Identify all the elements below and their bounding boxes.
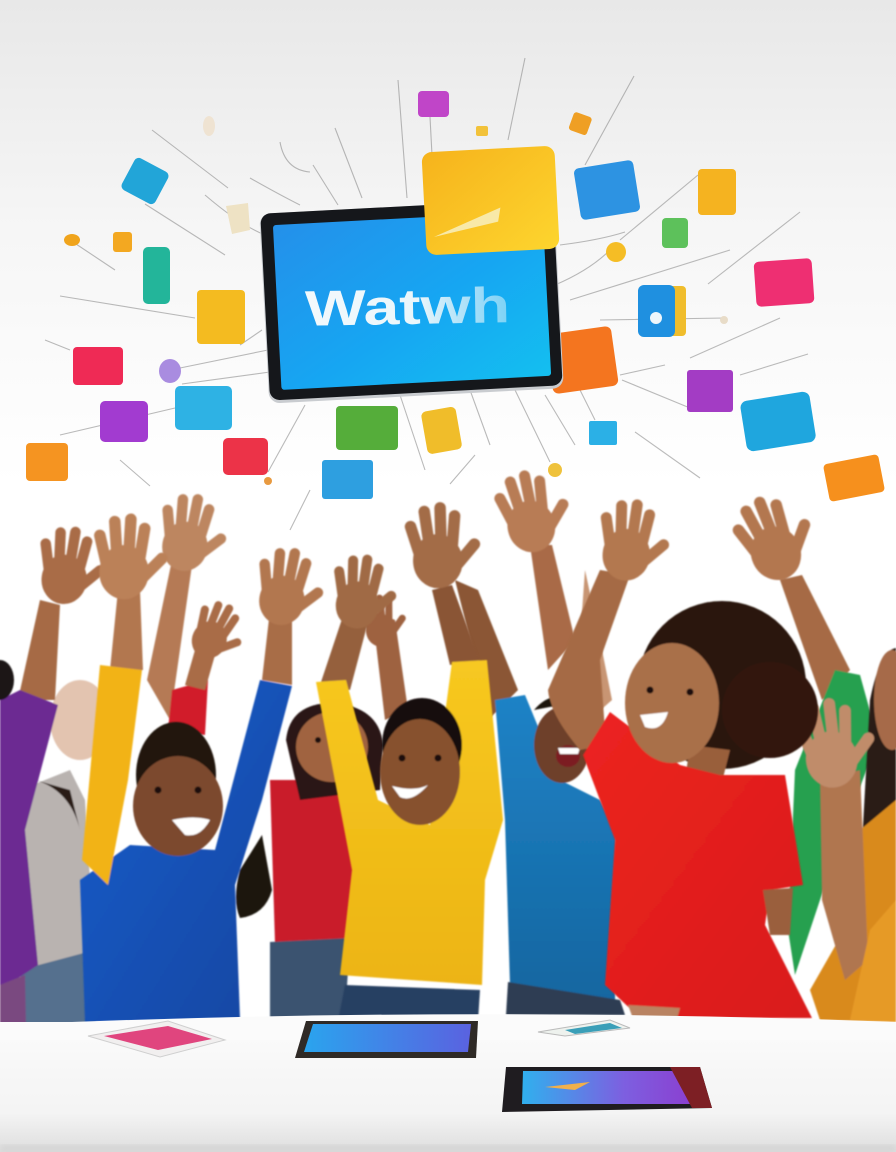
tile: red [73, 347, 123, 385]
small card on table [538, 1020, 630, 1036]
tile: green teal [143, 247, 170, 304]
tablet on table: left, pink [88, 1021, 225, 1057]
tile: green small [662, 218, 688, 248]
tile: pink [754, 258, 815, 307]
back child left, raised arm [50, 495, 226, 760]
small floating specks [203, 116, 728, 485]
tile: small amber [64, 234, 80, 246]
tile: yellow small [421, 406, 463, 455]
back child small hand [168, 599, 249, 735]
tile: orange left [26, 443, 68, 481]
child in purple [0, 529, 104, 1026]
tile: amber small [568, 111, 592, 136]
tile: yellow dot [606, 242, 626, 262]
tile: teal top left [120, 156, 170, 206]
tablet on table: centre [295, 1021, 478, 1058]
big yellow note [421, 146, 560, 255]
child in green [732, 489, 878, 975]
tile: small orange [113, 232, 132, 252]
tablet screen [273, 211, 551, 390]
tile: cyan right [740, 391, 817, 452]
tablet on table: right [502, 1067, 712, 1112]
tile: purple [100, 401, 148, 442]
burst of thin lines [45, 58, 808, 530]
tile: sky [175, 386, 232, 430]
child in blue tee [455, 468, 625, 1015]
right edge child in orange [797, 648, 896, 1022]
tile: blue bottom [322, 460, 373, 499]
tile: orange right [823, 454, 885, 502]
main tablet [259, 198, 564, 404]
tile: cyan small [589, 421, 617, 445]
tile: blue right [573, 160, 641, 220]
table shadow [0, 1145, 896, 1152]
tile: magenta top [418, 91, 449, 117]
child in yellow sweater, centre [316, 505, 503, 1021]
tile: yellow [197, 290, 245, 344]
tile: lilac [159, 359, 181, 383]
tile: green [336, 406, 398, 450]
child in blue sweater, left [80, 519, 323, 1022]
back children [0, 468, 878, 1026]
tile: blue amber [638, 285, 686, 337]
tablet title: Watwh [305, 277, 511, 337]
tile: violet [687, 370, 733, 412]
table [0, 1022, 896, 1152]
child in gray top [20, 770, 96, 1025]
child in red tee with curly hair [548, 502, 818, 1026]
floating tiles [26, 91, 885, 502]
tile: crimson [223, 438, 268, 475]
child in red [270, 595, 408, 1018]
table edge [0, 1014, 896, 1040]
tile: yellow right [698, 169, 736, 215]
tile: orange centre [545, 326, 619, 394]
